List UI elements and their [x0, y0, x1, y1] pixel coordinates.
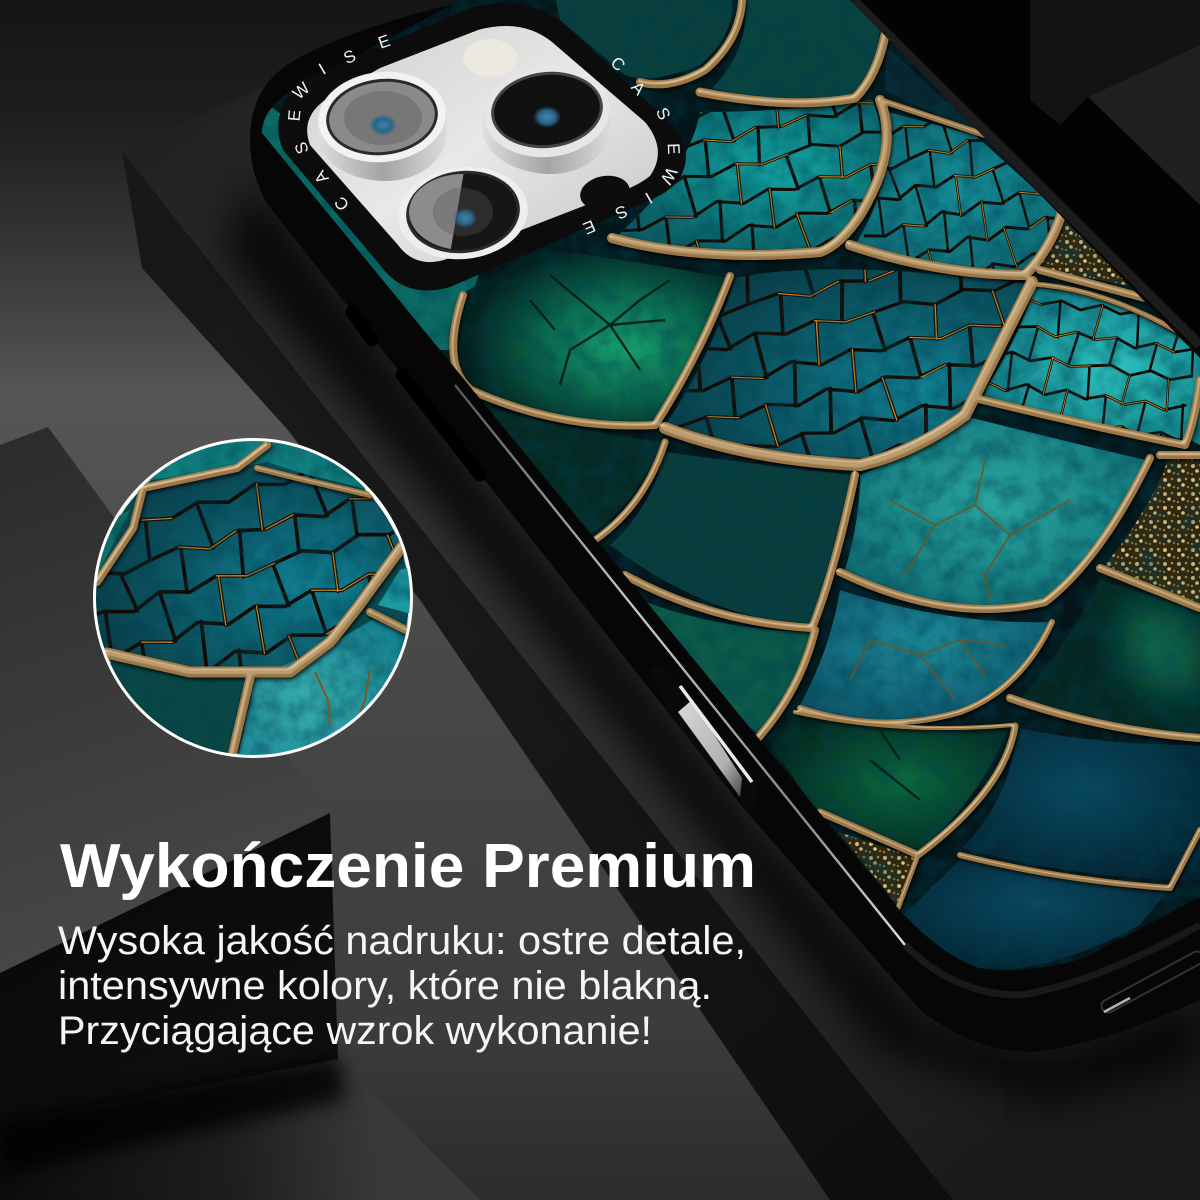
description text: Wysoka jakość nadruku: ostre detale,	[58, 919, 746, 963]
crackled scale 1	[615, 100, 881, 254]
gold seams	[453, 0, 1200, 908]
brand ring text: I	[315, 60, 329, 79]
brand ring text: A	[310, 167, 333, 187]
brand ring text: C	[331, 193, 353, 214]
description text: intensywne kolory, które nie blakną.	[58, 964, 712, 1008]
brand ring text: S	[291, 139, 313, 156]
brand ring text: E	[664, 143, 683, 155]
cracks in stone	[850, 460, 1070, 700]
brand ring text: S	[612, 201, 630, 223]
left lens	[314, 66, 450, 181]
description text: Przyciągające wzrok wykonanie!	[58, 1009, 652, 1053]
right lens	[480, 61, 614, 174]
crackled scale 4	[982, 288, 1200, 445]
microphone	[577, 172, 633, 214]
far left teal scale	[262, 107, 478, 350]
zoom circle callout	[93, 438, 413, 758]
brand ring text: E	[285, 109, 304, 122]
flash	[463, 39, 517, 77]
brand ring text: E	[580, 216, 598, 238]
bottom lens	[398, 167, 528, 260]
brand ring text: W	[289, 78, 314, 103]
description text	[58, 919, 746, 1053]
brand ring text: A	[627, 78, 649, 99]
printed scale back	[262, 0, 1200, 970]
camera module	[278, 3, 686, 291]
brand ring text: E	[376, 31, 393, 53]
volume button	[402, 375, 480, 475]
phone shadow	[225, 180, 1200, 1100]
circle: lower turquoise scale	[238, 620, 406, 755]
circle: upper scales	[143, 441, 366, 490]
brand ring text: I	[642, 188, 656, 207]
mute switch	[352, 312, 372, 340]
circle: veins	[315, 670, 370, 725]
big green scale	[455, 248, 728, 425]
camera frame	[278, 3, 686, 291]
circle: lower dark scale	[110, 663, 244, 754]
crackled scale 3	[665, 269, 1030, 465]
brand ring text: S	[652, 105, 674, 123]
circle: left sliver	[98, 510, 130, 575]
circle: crackled scale	[90, 462, 403, 672]
phone case	[250, 0, 1200, 1052]
title: Wykończenie Premium	[60, 832, 756, 901]
brand ring text: W	[657, 164, 681, 187]
brand ring text: C	[607, 53, 629, 75]
power button silver	[650, 666, 760, 812]
circle: right turquoise sliver	[378, 568, 410, 614]
crackled scale 2	[855, 112, 1060, 272]
circle: gold seams	[97, 445, 410, 755]
brand ring text	[285, 31, 683, 238]
speaker grille bottom	[1104, 958, 1197, 1012]
brand ring text: S	[341, 46, 359, 68]
